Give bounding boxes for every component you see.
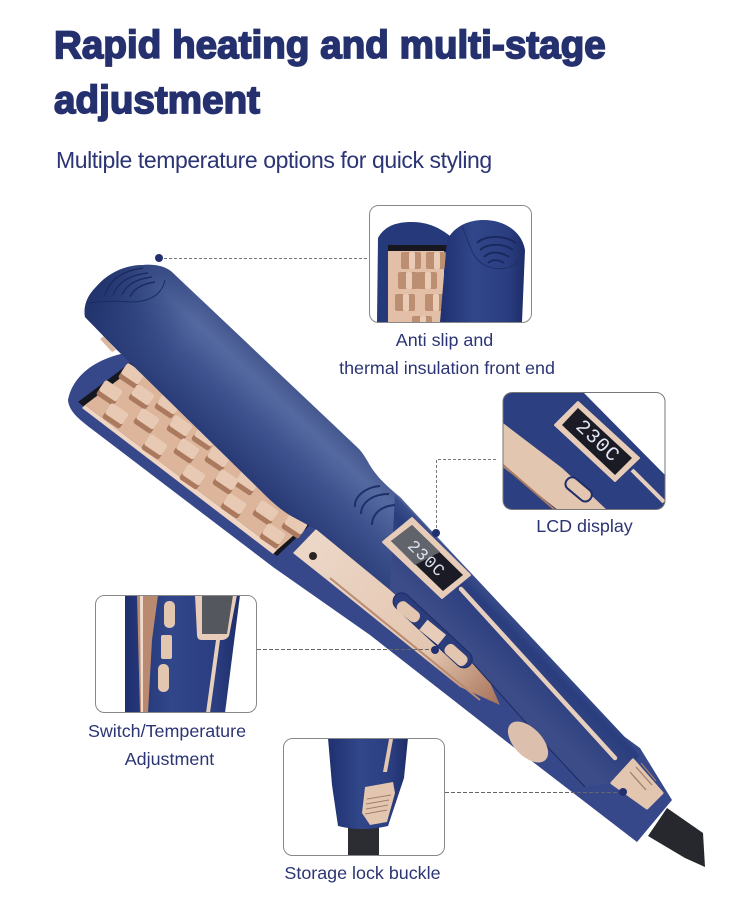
- title: [54, 24, 606, 122]
- inset: LCD display: [503, 392, 666, 510]
- label: storage lock buckle: Storage lock buckle: [284, 863, 441, 883]
- ceramic plate with raised blocks: [78, 318, 310, 556]
- gold neck panel: [293, 528, 500, 705]
- lower plate housing: [68, 353, 672, 842]
- label: switch temperature: Switch/Temperature: [88, 721, 246, 741]
- tip shading: [85, 265, 215, 375]
- callout line: LCD: [432, 460, 497, 537]
- label: LCD display: LCD display: [536, 516, 633, 536]
- small gold tab behind tip: [100, 336, 116, 352]
- power cord: [648, 808, 705, 867]
- LCD display: [383, 518, 470, 598]
- subtitle: Multiple temperature options for quick styling: [56, 147, 492, 173]
- label: adjustment: Adjustment: [125, 749, 214, 769]
- control buttons: [390, 589, 476, 671]
- inset: LCD display: 230C: [570, 416, 624, 468]
- label: anti slip: Anti slip and: [396, 330, 493, 350]
- upper arm body: [85, 265, 640, 787]
- temperature reading: 230C: [403, 537, 448, 582]
- grip ribs on tip: [87, 268, 165, 303]
- long gold accent strip: [461, 589, 615, 758]
- oval badge: [501, 714, 555, 770]
- handle shading: [390, 495, 640, 787]
- callout line: tip: [155, 254, 369, 262]
- title: Rapid heating and multi-stage: [54, 24, 606, 67]
- hair straightener product photo: [68, 265, 705, 867]
- inset: anti slip front end: [370, 206, 532, 333]
- callout line: buttons: [257, 646, 439, 654]
- storage lock buckle: [612, 760, 662, 808]
- grip ribs on neck: [355, 486, 395, 525]
- callout line: buckle: [445, 788, 627, 796]
- label: thermal insulation: thermal insulation front end: [339, 358, 555, 378]
- seam line on handle: [470, 660, 585, 787]
- inset: storage lock buckle: [284, 738, 444, 856]
- gold accent line: [330, 578, 480, 700]
- title: adjustment: [54, 79, 260, 122]
- pivot screw: [309, 552, 317, 560]
- inset: switch and temperature buttons: [96, 595, 256, 713]
